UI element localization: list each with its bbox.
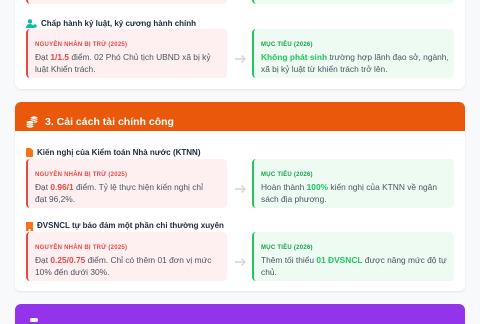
target box: service units: chủ. (261, 266, 277, 276)
cause box: service units (26, 232, 227, 281)
target box: discipline: xã bị kỷ luật từ khiển trách trở lên. (261, 64, 388, 74)
arrow (235, 55, 246, 63)
subheading: audit recommendations: Kiến nghị của Kiểm toán Nhà nước (KTNN) (37, 148, 200, 157)
panel: section 3 card (15, 102, 465, 291)
partial green box, previous row (252, 0, 454, 4)
cause box: audit: đạt 96,2%. (35, 194, 75, 204)
cause box: audit: Đạt 0.96/1 điểm. Tỷ lệ thực hiện kiến nghị chỉ (35, 182, 203, 192)
cause box: discipline (26, 29, 227, 78)
target box: discipline: MỤC TIÊU (2026) (261, 42, 313, 48)
cause box: service units: NGUYÊN NHÂN BỊ TRỪ (2025) (35, 245, 127, 251)
arrow (235, 258, 246, 266)
cause box: discipline: NGUYÊN NHÂN BỊ TRỪ (2025) (35, 42, 127, 48)
subheading: discipline: Chấp hành kỷ luật, kỷ cương hành chính (41, 19, 196, 28)
target box: service units (252, 232, 454, 281)
icon: section 4 icon, top edge (30, 318, 38, 322)
icon: coins (26, 116, 38, 128)
cause box: discipline: luật Khiển trách. (35, 64, 96, 74)
cause box: service units: 10% đến dưới 30%. (35, 266, 109, 276)
target box: audit: sách địa phương. (261, 194, 327, 204)
icon: document (26, 148, 33, 157)
subheading: public service units: ĐVSNCL tự bảo đảm một phần chi thường xuyên (37, 221, 224, 230)
panel: section 2 card (continued) (15, 0, 465, 89)
icon: user check (26, 19, 37, 28)
cause box: audit (26, 159, 227, 208)
target box: service units: Thêm tối thiểu 01 ĐVSNCL được nâng mức độ tự (261, 255, 447, 265)
icon: building (26, 222, 33, 231)
target box: audit (252, 159, 454, 208)
cause box: discipline: Đạt 1/1.5 điểm. 02 Phó Chủ tịch UBND xã bị kỷ (35, 52, 211, 62)
target box: discipline: Không phát sinh trường hợp lãnh đạo sở, ngành, (261, 52, 449, 62)
target box: audit: Hoàn thành 100% kiến nghị của KTNN về ngân (261, 182, 437, 192)
arrow (235, 185, 246, 193)
target box: service units: MỤC TIÊU (2026) (261, 245, 313, 251)
panel: section 4 header (15, 304, 465, 324)
cause box: service units: Đạt 0.25/0.75 điểm. Chỉ có thêm 01 đơn vị mức (35, 255, 211, 265)
cause box: audit: NGUYÊN NHÂN BỊ TRỪ (2025) (35, 172, 127, 178)
section header: public finance reform (15, 102, 465, 131)
heading: 3. Cải cách tài chính công (45, 116, 174, 128)
target box: discipline (252, 29, 454, 78)
partial red box, previous row (26, 0, 227, 4)
target box: audit: MỤC TIÊU (2026) (261, 172, 313, 178)
